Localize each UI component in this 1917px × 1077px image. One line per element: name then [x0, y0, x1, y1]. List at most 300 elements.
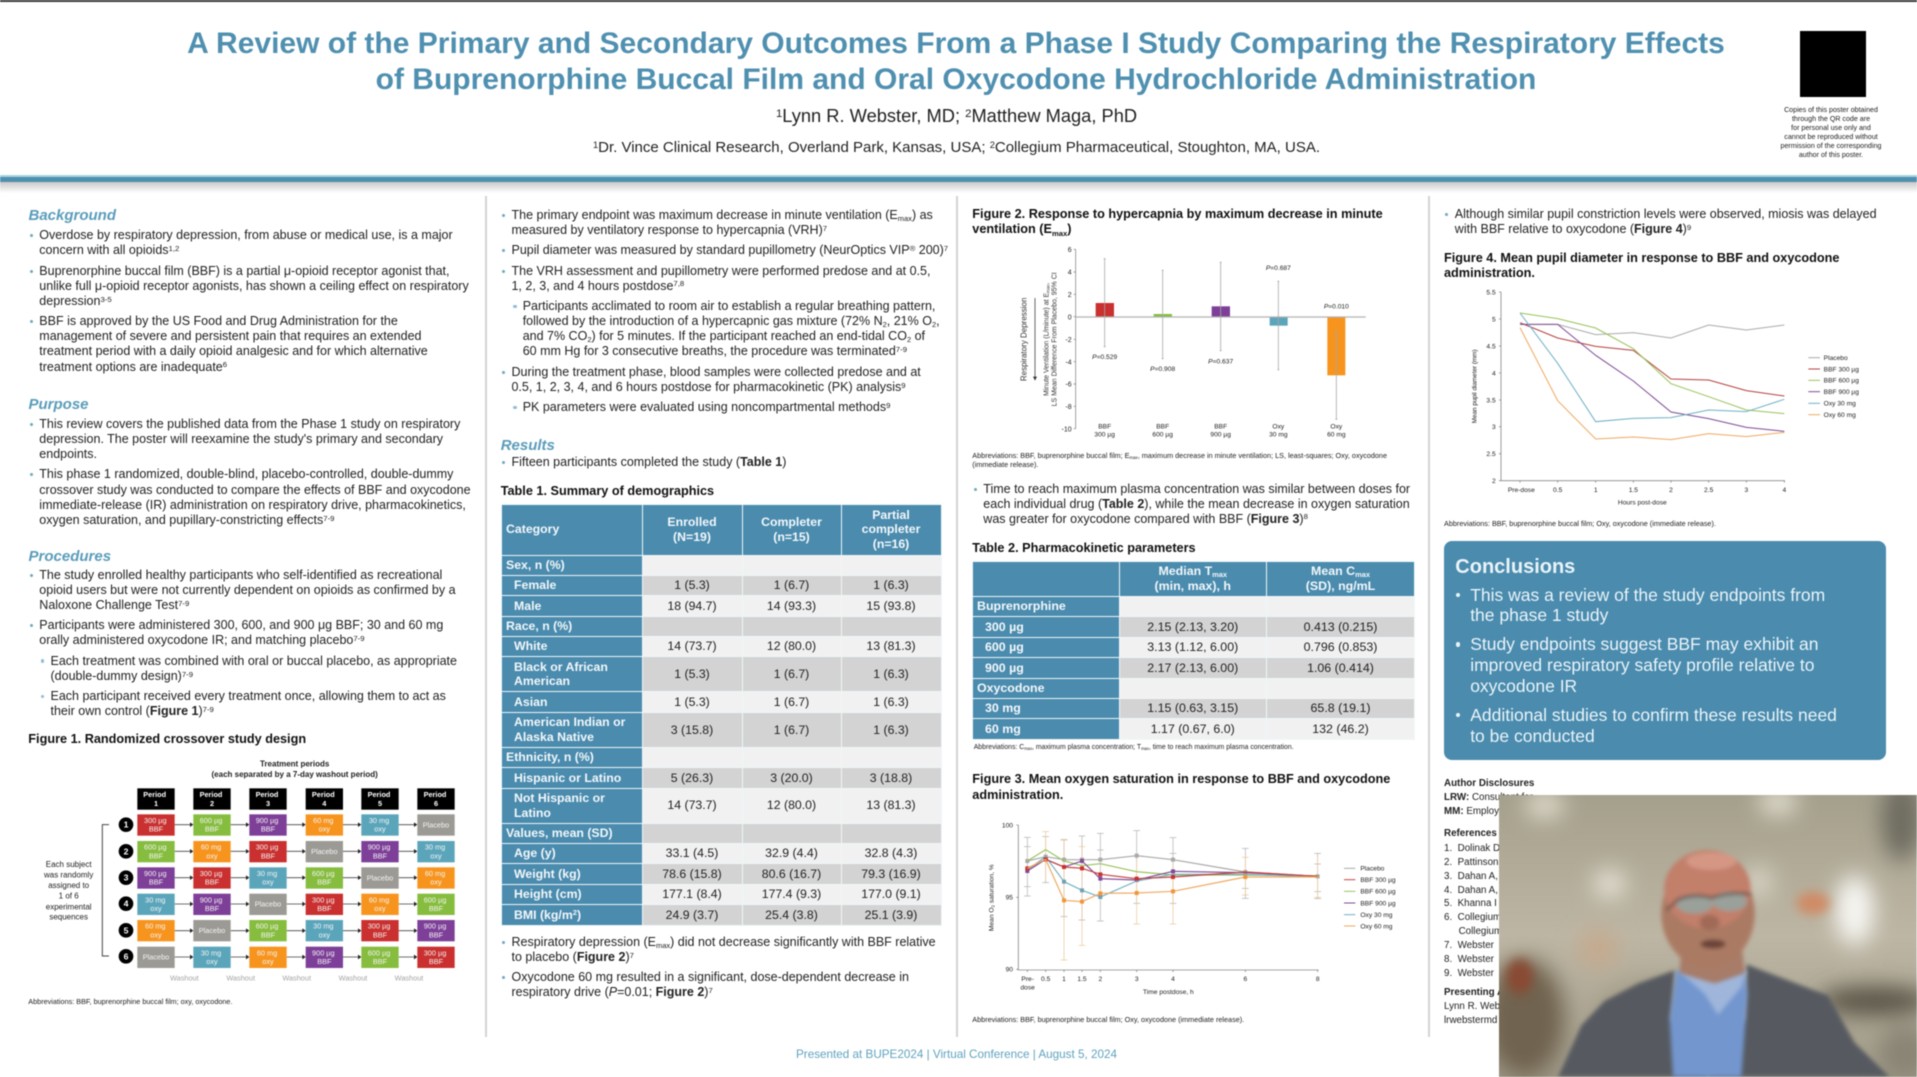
table 1: demographics: 1 (6.7): [774, 695, 809, 709]
sequence 4: BBF: [205, 904, 220, 913]
x labels: [1094, 423, 1346, 439]
column divider 1: [484, 196, 486, 1037]
assignment note: assigned to: [48, 881, 90, 890]
top edge strip: [0, 0, 1917, 2]
figure 3 title: [972, 772, 1391, 802]
sequence 3: BBF: [149, 878, 164, 887]
bullet: opioid users but were not currently dependent on opioids as confirmed by a: [39, 583, 456, 597]
P values: P=0.687: [1266, 265, 1291, 272]
sequence 4: 300 µg: [312, 895, 335, 904]
legend: Placebo: [1360, 866, 1385, 873]
figure 4 title: administration.: [1444, 266, 1535, 280]
series: oxy 30: [1027, 857, 1318, 899]
figure 2 abbreviations: Abbreviations: BBF, buprenorphine buccal film; Emax, maximum decrease in minute ventilation; LS, least-squares; Oxy, oxycodone: [972, 451, 1387, 460]
table 1: demographics: 177.4 (9.3): [762, 887, 821, 901]
period headers: Period: [143, 790, 166, 799]
y tick labels: [1002, 822, 1013, 974]
y axis title: Mean O: [989, 907, 996, 931]
sequence 4: 900 µg: [200, 895, 222, 904]
treatment periods heading: Treatment periods: [260, 759, 330, 768]
sequence 4: 600 µg: [424, 895, 446, 904]
sequence 2: 60 mg: [201, 843, 221, 852]
references list: 6. Collegium: [1444, 912, 1501, 923]
bullet: The study enrolled healthy participants who self-identified as recreational: [39, 568, 442, 582]
y tick labels: 2: [1492, 478, 1496, 485]
table 1: demographics: (n=15): [773, 530, 810, 544]
presenting author: lrwebstermd: [1444, 1015, 1497, 1026]
period headers: 4: [322, 799, 327, 808]
bullet: [501, 264, 946, 294]
sequence 4: Placebo: [255, 900, 281, 909]
x labels: 300 µg: [1094, 432, 1115, 439]
table 1: demographics: BMI (kg/m2): [514, 908, 581, 922]
figure 4 title: [1444, 251, 1840, 280]
bullet: improved respiratory safety profile relative to: [1470, 655, 1814, 675]
table 1: demographics: 3 (15.8): [671, 723, 713, 737]
sequence 6: oxy: [206, 957, 218, 966]
bullet: Study endpoints suggest BBF may exhibit an: [1470, 634, 1818, 654]
y axis: 4: [1068, 270, 1072, 277]
series: oxy 60: [1027, 859, 1318, 904]
sequence 3: oxy: [262, 878, 274, 887]
bullet: to placebo (Figure 2)7: [511, 950, 634, 964]
x tick labels: [1508, 487, 1786, 494]
y tick labels: 95: [1006, 895, 1013, 902]
bullet: management of severe and persistent pain that requires an extended: [39, 329, 422, 343]
x labels: 600 µg: [1152, 432, 1173, 439]
table 1: demographics: 12 (80.0): [767, 639, 816, 653]
sequence 1: 900 µg: [256, 816, 278, 825]
bullet: immediate-release (IR) administration on respiratory drive, pharmacokinetics,: [39, 498, 466, 512]
sub-bullet: [28, 654, 478, 684]
P values: P=0.908: [1150, 366, 1175, 373]
sequence 5: BBF: [373, 930, 388, 939]
P values: P=0.010: [1324, 303, 1349, 310]
y tick labels: 3: [1492, 424, 1496, 431]
references heading: References: [1444, 828, 1497, 838]
table 1: demographics: 25.1 (3.9): [865, 908, 917, 922]
table 1: demographics: Completer: [761, 515, 822, 529]
panel: results bullets: [501, 935, 936, 1000]
table 1: demographics: American: [514, 674, 570, 688]
QR note: cannot be reproduced without: [1784, 132, 1878, 140]
series: oxy 30: [1520, 313, 1784, 422]
x tick labels: 0.5: [1041, 976, 1051, 983]
bullet: [1444, 634, 1885, 697]
sequence 6: BBF: [373, 957, 388, 966]
table 1: demographics: White: [514, 639, 547, 653]
y tick labels: [1486, 289, 1496, 485]
heading: background: Background: [28, 207, 116, 224]
legend: BBF 600 µg: [1824, 378, 1859, 385]
bullet: crossover study was conducted to compare the effects of BBF and oxycodone: [39, 483, 471, 497]
table 1: demographics: 1 (6.7): [774, 723, 809, 737]
table 1: demographics: 33.1 (4.5): [666, 846, 718, 860]
legend: Oxy 30 mg: [1360, 912, 1393, 919]
table 1: demographics: 79.3 (16.9): [861, 867, 921, 881]
panel: purpose: [28, 396, 471, 528]
x tick labels: 4: [1171, 976, 1175, 983]
bullet: orally administered oxycodone IR; and matching placebo7-9: [39, 633, 365, 647]
axes: [1016, 825, 1319, 972]
sequence 3: BBF: [317, 878, 332, 887]
x labels: Oxy: [1272, 423, 1285, 430]
bullet: respiratory drive (P=0.01; Figure 2)7: [511, 985, 713, 999]
figure 3 title: administration.: [972, 788, 1063, 802]
table 1: demographics: Enrolled: [667, 515, 717, 529]
table 1: demographics: Ethnicity, n (%): [506, 750, 594, 764]
video: presenter: [1498, 794, 1917, 1077]
header: [187, 26, 1882, 159]
bullet: 1, 2, 3, and 4 hours postdose7,8: [511, 279, 684, 293]
x tick labels: 4: [1782, 487, 1786, 494]
sequence 1: [137, 814, 455, 836]
x labels: BBF: [1156, 423, 1169, 430]
table 1: demographics: Female: [514, 578, 556, 592]
table 1: demographics: 13 (81.3): [866, 639, 916, 653]
sequence 6: 30 mg: [201, 948, 221, 957]
bullet: depression3-5: [39, 294, 112, 308]
sequence 6: 900 µg: [312, 948, 335, 957]
table 1: demographics: Weight (kg): [514, 867, 581, 881]
figure 4 abbreviations: Abbreviations: BBF, buprenorphine buccal film; Oxy, oxycodone (immediate release).: [1444, 519, 1716, 528]
bullet: pk and oxygen saturation: Time to reach maximum plasma concentration was similar between doses for: [983, 482, 1410, 496]
sequence number badges: 4: [124, 899, 129, 909]
axes: [1499, 292, 1785, 483]
y axis: -10: [1062, 426, 1072, 433]
bullet: unlike full μ-opioid receptor agonists, has shown a ceiling effect on respiratory: [39, 279, 469, 293]
table 2: pharmacokinetic parameters: 300 µg: [985, 620, 1024, 634]
sequence number badges: 6: [124, 951, 129, 961]
table 1: demographics: 32.8 (4.3): [865, 846, 917, 860]
bullet: BBF is approved by the US Food and Drug Administration for the: [39, 314, 398, 328]
table 1: demographics: American Indian or: [514, 715, 625, 729]
sequence 5: 900 µg: [424, 922, 446, 931]
table 1: demographics: 1 (6.3): [873, 695, 909, 709]
bullet: [501, 970, 946, 1000]
sequence 1: 60 mg: [313, 816, 334, 825]
assignment note: was randomly: [43, 871, 93, 880]
sequence 3: 60 mg: [425, 869, 445, 878]
table 2: pharmacokinetic parameters: 0.413 (0.215): [1304, 620, 1377, 634]
series: BBF 300: [1520, 323, 1784, 396]
treatment periods heading: (each separated by a 7-day washout period): [212, 770, 378, 779]
bullet: Overdose by respiratory depression, from abuse or medical use, is a major: [39, 228, 453, 242]
sequence 1: BBF: [261, 825, 276, 834]
y axis: -2: [1065, 337, 1072, 344]
x tick labels: Pre-dose: [1508, 487, 1535, 494]
x tick labels: Pre-: [1021, 976, 1034, 983]
heading: purpose: Purpose: [28, 396, 89, 412]
figure 4: pupil diameter line chart: [1471, 289, 1860, 507]
bullet: Pupil diameter was measured by standard pupillometry (NeurOptics VIP® 200)7: [511, 243, 948, 257]
washout labels: Washout: [339, 974, 367, 983]
bullet: This review covers the published data from the Phase 1 study on respiratory: [39, 417, 460, 431]
period headers: 5: [378, 799, 382, 808]
sequence 2: BBF: [373, 851, 388, 860]
table 1: demographics: 18 (94.7): [667, 599, 717, 613]
table 1: demographics: 1 (6.3): [873, 667, 909, 681]
table 2: pharmacokinetic parameters: 3.13 (1.12, 6.00): [1147, 640, 1238, 654]
series: BBF 900: [1025, 857, 1318, 882]
figure 1: crossover diagram: [43, 759, 456, 983]
table 2: pharmacokinetic parameters: [972, 561, 1415, 740]
table 2: pharmacokinetic parameters: Buprenorphine: [977, 599, 1066, 613]
bullet: pupil constriction: [1444, 207, 1877, 236]
blurred room background: [1485, 778, 1917, 1077]
sequence 2: [137, 841, 455, 862]
period headers: Period: [200, 790, 222, 799]
sequence 2: 900 µg: [368, 843, 390, 852]
sequence 5: oxy: [150, 930, 162, 939]
table 2: pharmacokinetic parameters: 1.17 (0.67, 6.0): [1151, 722, 1235, 736]
x tick labels: 2: [1669, 487, 1673, 494]
table 1: demographics: 1 (6.3): [873, 723, 909, 737]
author disclosures: MM: Employee of: [1444, 806, 1521, 816]
sequence 5: [137, 920, 455, 941]
QR note: author of this poster.: [1799, 150, 1863, 158]
bullet: Buprenorphine buccal film (BBF) is a partial μ-opioid receptor agonist that,: [39, 264, 449, 278]
author disclosures: [1444, 778, 1535, 817]
table 2: pharmacokinetic parameters: 900 µg: [985, 661, 1024, 675]
table 1: demographics: 1 (6.7): [774, 578, 809, 592]
sequence 4: [137, 894, 455, 915]
bullet: concern with all opioids1,2: [39, 243, 179, 257]
sequence 2: BBF: [261, 851, 276, 860]
y tick labels: 5.5: [1486, 289, 1496, 296]
footer: Presented at BUPE2024 | Virtual Conference | August 5, 2024: [796, 1048, 1117, 1061]
table 2: pharmacokinetic parameters: 30 mg: [985, 701, 1021, 715]
table 1: demographics: 1 (6.7): [774, 667, 809, 681]
sub-bullet: followed by the introduction of a hypercapnic gas mixture (72% N2, 21% O2,: [523, 314, 940, 329]
sequence 1: 300 µg: [144, 816, 167, 825]
y tick labels: 5: [1492, 316, 1496, 323]
period headers: Period: [256, 790, 278, 799]
washout labels: Washout: [282, 974, 311, 983]
sequence 4: oxy: [150, 904, 162, 913]
P values: [1092, 265, 1349, 373]
y axis: [1062, 247, 1076, 433]
bullet: endpoints.: [39, 447, 97, 461]
table 2: pharmacokinetic parameters: 1.15 (0.63, 3.15): [1147, 701, 1238, 715]
x tick labels: 3: [1135, 976, 1139, 983]
affiliations: 1Dr. Vince Clinical Research, Overland Park, Kansas, USA; 2Collegium Pharmaceutical, Stoughton, MA, USA.: [593, 138, 1320, 156]
table 2: pharmacokinetic parameters: 1.06 (0.414): [1307, 661, 1374, 675]
sequence 1: Placebo: [423, 820, 449, 829]
table 1: demographics: Partial: [872, 508, 910, 522]
table 1: demographics: Race, n (%): [506, 619, 572, 633]
y tick labels: 2.5: [1486, 451, 1496, 458]
legend: [1808, 355, 1859, 419]
legend: BBF 900 µg: [1360, 900, 1396, 907]
author disclosures: Author Disclosures: [1444, 778, 1534, 788]
sequence 1: BBF: [149, 825, 164, 834]
sequence 6: Placebo: [143, 953, 169, 962]
y axis titles: ,: [1044, 283, 1051, 285]
presenting author: [1444, 986, 1529, 1026]
assignment note: 1 of 6: [59, 892, 79, 901]
period headers: Period: [424, 790, 446, 799]
error bars: [1024, 831, 1321, 960]
x tick labels: 1: [1062, 976, 1066, 983]
bullet: [501, 365, 946, 395]
panel: procedures: [28, 548, 458, 718]
sub-bullet: [28, 689, 478, 719]
sequence 5: 300 µg: [368, 922, 390, 931]
bullet: This phase 1 randomized, double-blind, placebo-controlled, double-dummy: [39, 467, 453, 481]
bullet: Fifteen participants completed the study (Table 1): [511, 455, 786, 469]
assignment note: [43, 860, 93, 922]
table 1: demographics: Black or African: [514, 660, 608, 674]
legend: [1344, 866, 1396, 930]
sequence 4: BBF: [429, 904, 444, 913]
x tick labels: [1020, 976, 1320, 991]
sequence number badges: 3: [124, 873, 129, 883]
figure 3 title: Figure 3. Mean oxygen saturation in response to BBF and oxycodone: [972, 772, 1390, 786]
table 1: demographics: Male: [514, 599, 541, 613]
series: BBF 600: [1027, 850, 1318, 876]
heading: conclusions: Conclusions: [1455, 556, 1575, 578]
washout labels: [170, 974, 423, 983]
sub-bullet: PK parameters were evaluated using noncompartmental methods9: [523, 400, 890, 414]
sub-bullet: their own control (Figure 1)7-9: [50, 704, 214, 718]
x labels: BBF: [1214, 423, 1227, 430]
figure 2 title: ventilation (Emax): [972, 222, 1071, 238]
references list: 1. Dolinak D: [1444, 843, 1500, 854]
x labels: Oxy: [1330, 423, 1343, 430]
table 1: demographics: 78.6 (15.8): [662, 867, 722, 881]
presenting author: Lynn R. Webster: [1444, 1001, 1516, 1012]
figure 2 title: [972, 207, 1383, 238]
sequence 2: 300 µg: [256, 843, 278, 852]
table 1: demographics: 1 (5.3): [674, 578, 710, 592]
sequence 5: oxy: [319, 930, 330, 939]
y tick labels: 3.5: [1486, 397, 1496, 404]
table 1: demographics: 177.1 (8.4): [662, 887, 722, 901]
sequence 4: 60 mg: [369, 895, 389, 904]
washout labels: Washout: [395, 974, 423, 983]
bars: [1096, 303, 1345, 375]
table 1: demographics: 5 (26.3): [671, 771, 713, 785]
series: oxy 60: [1520, 328, 1784, 440]
sequence number badges: 1: [124, 820, 129, 830]
sequence 2: BBF: [149, 851, 164, 860]
x tick labels: 2: [1098, 976, 1102, 983]
bullet: Naloxone Challenge Test7-9: [39, 598, 189, 612]
P values: P=0.529: [1092, 354, 1117, 361]
bullet: Additional studies to confirm these results need: [1470, 705, 1837, 725]
bullet: [501, 208, 946, 238]
bracket: [102, 825, 109, 956]
x labels: 900 µg: [1210, 432, 1231, 439]
table 1: demographics: 12 (80.0): [767, 798, 816, 812]
table 2: pharmacokinetic parameters: 65.8 (19.1): [1311, 701, 1370, 715]
table 1: demographics: 1 (5.3): [674, 695, 710, 709]
table 1: demographics: Not Hispanic or: [514, 791, 605, 805]
sub-bullet: and 7% CO2) for 5 minutes. If the participant reached an end-tidal CO2 of: [523, 329, 925, 344]
table 1: demographics: 1 (6.3): [873, 578, 909, 592]
table 1: demographics: completer: [862, 522, 920, 536]
table 2 title: Table 2. Pharmacokinetic parameters: [972, 541, 1196, 555]
sequence 3: 30 mg: [257, 869, 277, 878]
table 2: pharmacokinetic parameters: 132 (46.2): [1312, 722, 1369, 736]
QR note: through the QR code are: [1792, 114, 1870, 122]
table 2: pharmacokinetic parameters: (SD), ng/mL: [1306, 579, 1375, 593]
references list: Collegium: [1459, 926, 1502, 937]
bullet: pk and oxygen saturation: [973, 482, 1410, 526]
sequence 2: 600 µg: [144, 843, 167, 852]
bullet: [28, 314, 478, 375]
sub-bullet: Participants acclimated to room air to establish a regular breathing pattern,: [523, 299, 935, 313]
x labels: 60 mg: [1327, 432, 1346, 439]
assignment note: experimental: [46, 902, 92, 911]
table 1: demographics: 14 (73.7): [667, 798, 717, 812]
y axis title: Mean pupil diameter (mm): [1472, 349, 1479, 423]
table 1: demographics: Sex, n (%): [506, 558, 565, 572]
table 1: demographics: Values, mean (SD): [506, 826, 613, 840]
table 1 title: Table 1. Summary of demographics: [501, 484, 714, 498]
sequence 2: Placebo: [311, 847, 338, 856]
bullet: pupil constriction: Although similar pupil constriction levels were observed, miosis was delayed: [1455, 207, 1877, 221]
table 1: demographics: (n=16): [873, 537, 909, 551]
assignment note: Each subject: [46, 860, 92, 869]
P values: P=0.637: [1208, 359, 1233, 366]
sequence number badges: 5: [124, 925, 129, 935]
sequence 1: oxy: [374, 825, 386, 834]
y axis: -4: [1065, 359, 1072, 366]
table 2: pharmacokinetic parameters: 2.17 (2.13, 6.00): [1147, 661, 1238, 675]
QR note: permission of the corresponding: [1781, 142, 1881, 150]
y axis titles: LS Mean Difference From Placebo, 95% CI: [1052, 272, 1059, 406]
bullet: oxygen saturation, and pupillary-constricting effects7-9: [39, 513, 334, 527]
table 1: demographics: 3 (20.0): [770, 771, 813, 785]
title: [187, 26, 1725, 96]
bullet: During the treatment phase, blood samples were collected predose and at: [511, 365, 921, 379]
series: BBF 300: [1025, 857, 1318, 881]
bullet: [1444, 705, 1885, 746]
sequence 5: BBF: [261, 930, 276, 939]
sequence 4: BBF: [317, 904, 332, 913]
figure 2 abbreviations: [972, 451, 1388, 469]
x tick labels: 1: [1594, 487, 1598, 494]
table 1: demographics: 13 (81.3): [866, 798, 916, 812]
bullet: Participants were administered 300, 600, and 900 μg BBF; 30 and 60 mg: [39, 618, 443, 632]
y axis titles: Respiratory Depression: [1019, 298, 1028, 381]
table 2 abbreviations: Abbreviations: Cmax, maximum plasma concentration; Tmax, time to reach maximum plasma concentration.: [974, 744, 1294, 751]
y axis titles: Minute Ventilation (L/minute) at E: [1044, 293, 1051, 396]
bullet: depression. The poster will reexamine the study's primary and secondary: [39, 432, 443, 446]
references list: 2. Pattinson: [1444, 857, 1498, 868]
references list: 3. Dahan A,: [1444, 871, 1498, 882]
series: BBF 900: [1520, 324, 1784, 431]
presenter shirt: [1670, 970, 1748, 1077]
y axis: 6: [1068, 247, 1072, 254]
table 1: demographics: Age (y): [514, 846, 556, 860]
bullet: [28, 467, 478, 528]
y axis titles: max: [1046, 284, 1051, 293]
series: BBF 600: [1520, 313, 1784, 414]
bullet: oxycodone IR: [1470, 676, 1577, 696]
title: A Review of the Primary and Secondary Outcomes From a Phase I Study Comparing the Respiratory Effects: [187, 26, 1725, 60]
sequence 3: Placebo: [367, 873, 393, 882]
presenting author: Presenting Author: [1444, 987, 1529, 998]
bullet: Oxycodone 60 mg resulted in a significant, dose-dependent decrease in: [511, 970, 909, 984]
table 1: demographics: 24.9 (3.7): [666, 908, 718, 922]
table 2: pharmacokinetic parameters: (min, max), h: [1155, 579, 1231, 593]
sequence 1: 30 mg: [369, 816, 389, 825]
figure 2 abbreviations: (immediate release).: [972, 460, 1038, 469]
period headers: 1: [154, 799, 158, 808]
